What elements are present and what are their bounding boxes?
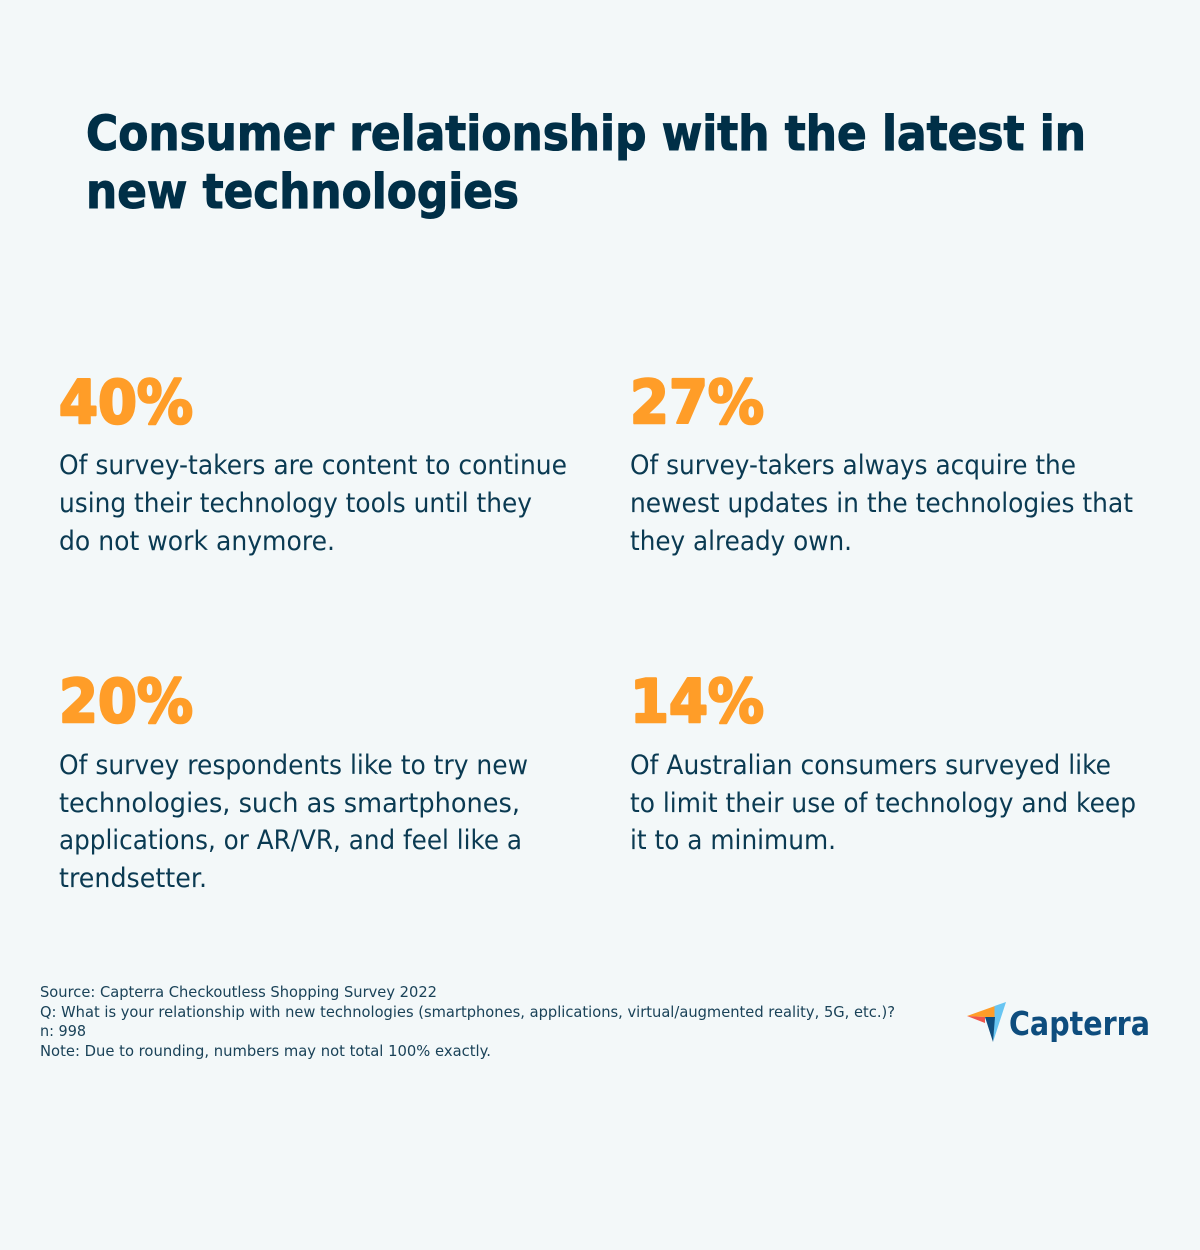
stat description 40%: Of survey-takers are content to continue: [59, 450, 567, 481]
source notes: [40, 983, 895, 1060]
stat description 20%: trendsetter.: [59, 863, 207, 894]
stat description 20%: Of survey respondents like to try new: [59, 750, 528, 781]
stat description 27%: [630, 450, 1133, 557]
stat description 27%: they already own.: [630, 526, 852, 557]
stat description 27%: newest updates in the technologies that: [630, 488, 1133, 519]
title: Consumer relationship with the latest in: [86, 106, 1086, 162]
stat description 27%: Of survey-takers always acquire the: [630, 450, 1076, 481]
wordmark: Capterra: [1009, 1004, 1150, 1043]
stat number 20%: 20%: [59, 667, 193, 737]
stat description 20%: [59, 750, 528, 894]
stat description 40%: [59, 450, 567, 557]
panel: 40% stat: [59, 368, 567, 557]
stat description 40%: do not work anymore.: [59, 526, 335, 557]
source notes: Q: What is your relationship with new technologies (smartphones, applications, virtual/augmented reality, 5G, etc.)?: [40, 1003, 895, 1021]
stat description 40%: using their technology tools until they: [59, 488, 532, 519]
title: [86, 106, 1086, 220]
title: new technologies: [86, 164, 519, 220]
stat number 27%: 27%: [630, 368, 764, 438]
source notes: Note: Due to rounding, numbers may not total 100% exactly.: [40, 1042, 491, 1060]
panel: 20% stat: [59, 667, 528, 894]
stat description 20%: applications, or AR/VR, and feel like a: [59, 825, 522, 856]
panel: 27% stat: [630, 368, 1133, 557]
stat number 14%: 14%: [630, 667, 764, 737]
stat number 40%: 40%: [59, 368, 193, 438]
panel: 14% stat: [630, 667, 1136, 856]
stat description 14%: to limit their use of technology and keep: [630, 788, 1136, 819]
source notes: n: 998: [40, 1022, 86, 1040]
source notes: Source: Capterra Checkoutless Shopping Survey 2022: [40, 983, 437, 1001]
stat description 14%: Of Australian consumers surveyed like: [630, 750, 1111, 781]
stat description 14%: it to a minimum.: [630, 825, 836, 856]
logo: Capterra: [967, 1002, 1150, 1043]
stat description 20%: technologies, such as smartphones,: [59, 788, 520, 819]
stat description 14%: [630, 750, 1136, 856]
icon: Capterra arrow: [967, 1002, 1006, 1042]
